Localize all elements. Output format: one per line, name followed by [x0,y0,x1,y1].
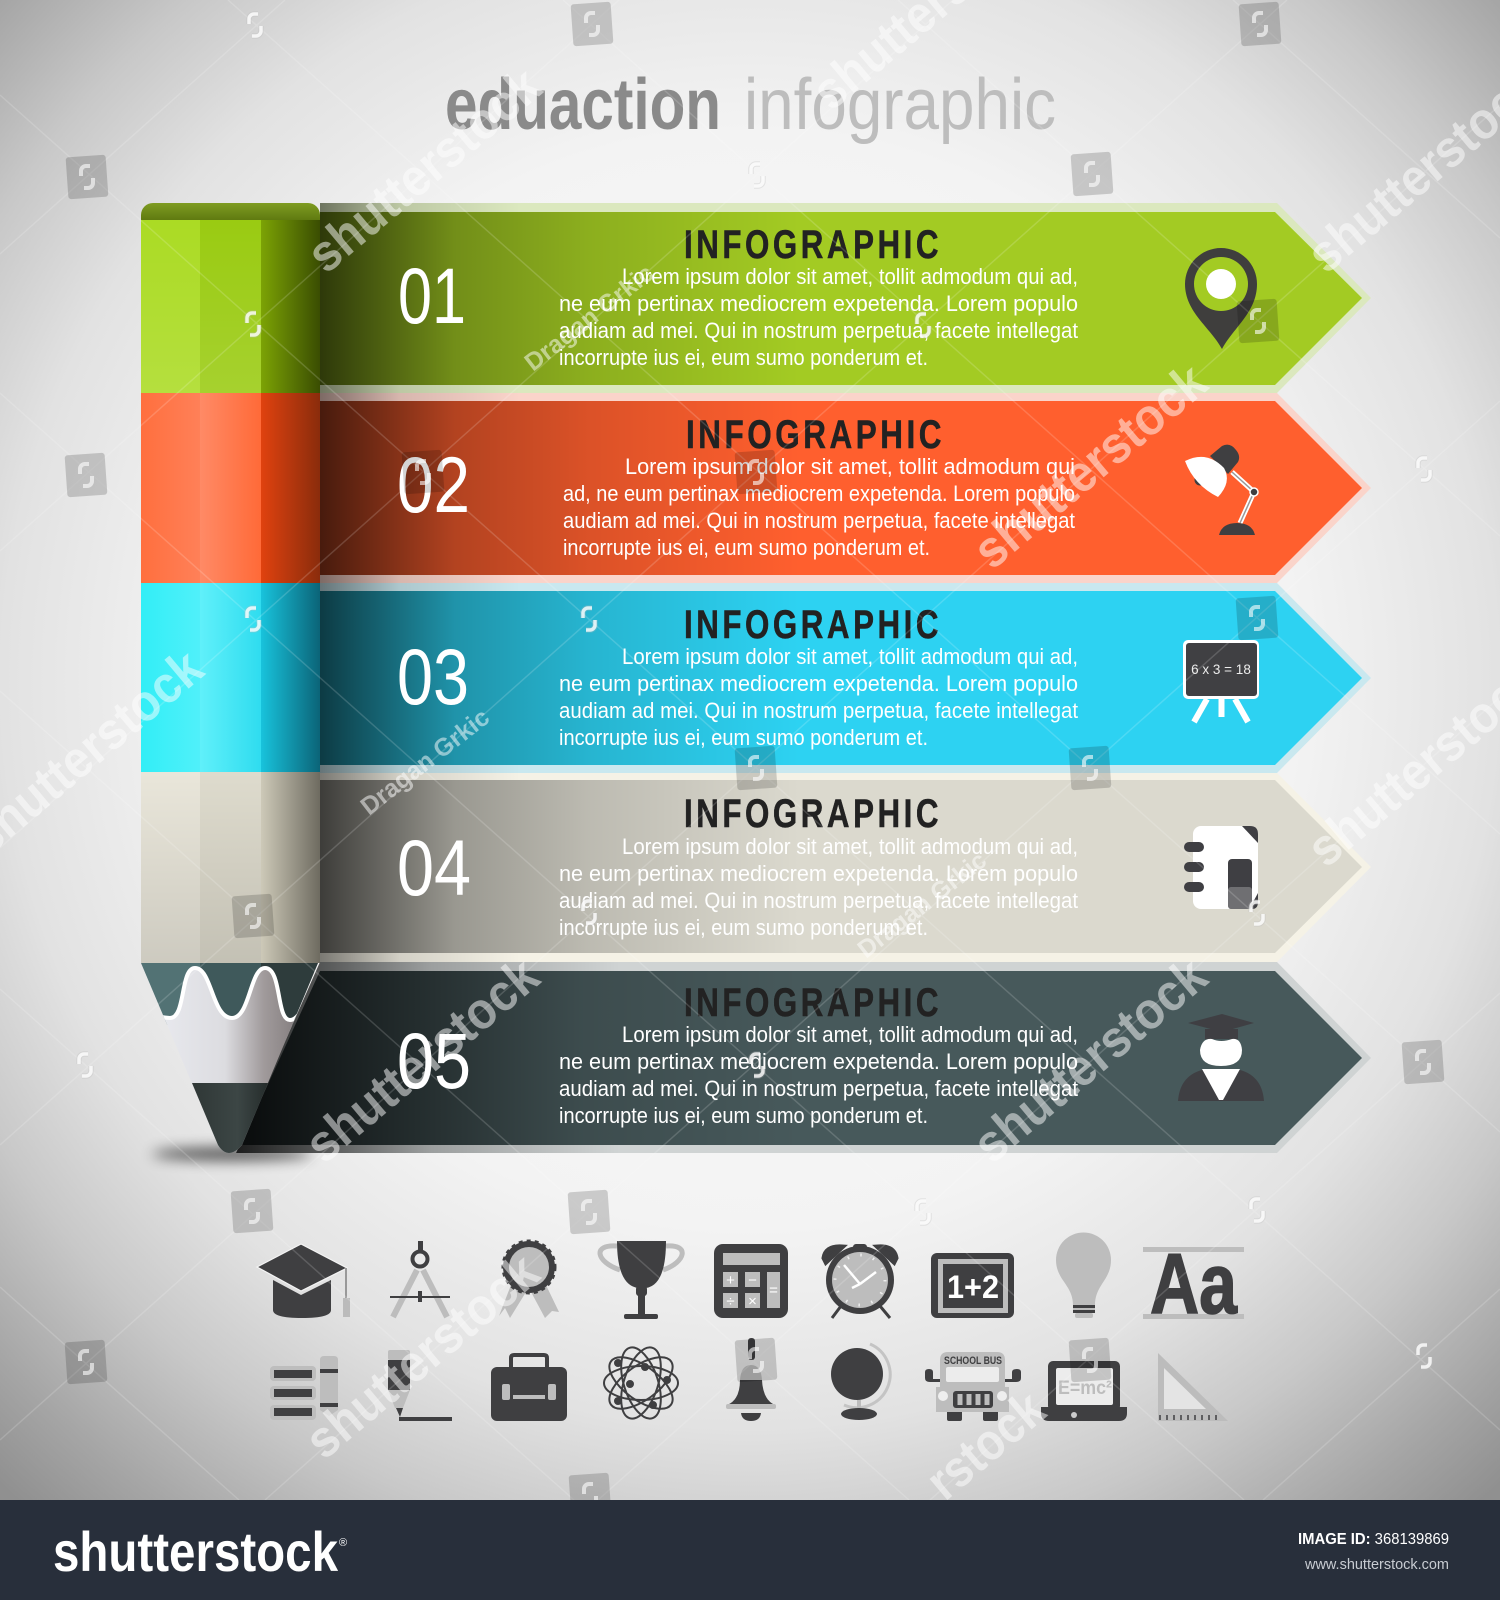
panel: banner 05: incorrupte ius ei, eum sumo ponderum et. [559,1103,928,1128]
panel: banner 01 [320,203,1371,393]
panel: banner 02: ad, ne eum pertinax mediocrem expetenda. Lorem populo [563,481,1075,506]
icon: school bus [925,1352,1021,1421]
ground shadow under pencil [152,1148,312,1160]
footer registered mark: ® [339,1537,347,1549]
panel: banner 02 [320,393,1371,583]
pencil lead tip [192,1083,268,1153]
icon: chalkboard [1183,640,1259,722]
panel: banner 02: Lorem ipsum dolor sit amet, tollit admodum qui [625,454,1075,479]
panel: banner 02: 02 [397,440,470,529]
icon: alarm clock [824,1244,896,1318]
icon: calculator: + [726,1272,735,1289]
footer image id: IMAGE ID: 368139869 [1298,1531,1449,1548]
icon: desk lamp [1185,445,1258,535]
watermark overlay: Dragan Grkic [519,259,659,377]
watermark overlay: shutterstock [294,1243,550,1470]
icon: marker pen [388,1350,452,1421]
panel: banner 04: audiam ad mei. Qui in nostrum perpetua, facete intellegat [559,888,1078,913]
footer website: www.shutterstock.com [1304,1556,1449,1573]
watermark overlay: shutterstock [294,947,550,1174]
icon: atom [601,1343,681,1423]
panel: banner 01: INFOGRAPHIC [684,223,942,267]
icon: set square [1158,1353,1228,1421]
panel: banner 05: ne eum pertinax mediocrem expetenda. Lorem populo [559,1049,1078,1074]
watermark overlay: Dragan Grkic [852,846,992,964]
panel: banner 01: 01 [398,251,466,340]
watermark overlay: shutterstock [962,353,1218,580]
icon: notebook [1184,826,1258,909]
panel: banner 01: Lorem ipsum dolor sit amet, tollit admodum qui ad, [622,264,1078,289]
panel: banner 04 [320,773,1371,962]
pencil wood cone [141,963,321,1153]
panel: banner 03: ne eum pertinax mediocrem expetenda. Lorem populo [559,671,1078,696]
icon: hand bell [726,1338,776,1421]
panel: banner 04: incorrupte ius ei, eum sumo ponderum et. [559,915,928,940]
icon: graduate [1178,1014,1264,1101]
icon: globe [831,1344,890,1420]
watermark overlay: rstock [915,1380,1056,1511]
panel: banner 04: INFOGRAPHIC [684,792,942,836]
icon: calculator: − [748,1272,757,1289]
title: eduaction [445,65,721,145]
icon: briefcase [491,1355,567,1421]
icon: laptop E=mc2: E=mc² [1058,1378,1112,1399]
panel: banner 04: Lorem ipsum dolor sit amet, tollit admodum qui ad, [622,834,1078,859]
icon: calculator: × [748,1293,757,1310]
pencil [141,203,321,1153]
icon row 1 [257,1232,1244,1332]
footer logo: shutterstock [53,1520,339,1583]
icon: location pin [1185,248,1257,349]
panel: banner 03: Lorem ipsum dolor sit amet, tollit admodum qui ad, [622,644,1078,669]
panel: banner 01: audiam ad mei. Qui in nostrum perpetua, facete intellegat [559,318,1078,343]
icon: graduation cap [257,1244,350,1318]
panel: banner 05: INFOGRAPHIC [684,981,942,1025]
icon: calculator [714,1244,788,1318]
panel: banner 02: incorrupte ius ei, eum sumo ponderum et. [563,535,930,560]
panel: banner 05: 05 [397,1016,471,1105]
icon: board 1+2: 1+2 [947,1269,999,1305]
panel: banner 03: incorrupte ius ei, eum sumo ponderum et. [559,725,928,750]
panel: banner 02: audiam ad mei. Qui in nostrum perpetua, facete intellegat [563,508,1075,533]
icon: calculator: ÷ [726,1293,735,1310]
icon: board 1+2 [931,1253,1014,1318]
panel: banner 02: INFOGRAPHIC [686,413,945,457]
panel: banner 05 [236,962,1371,1153]
panel: banner 01: incorrupte ius ei, eum sumo ponderum et. [559,345,928,370]
panel: banner 04: ne eum pertinax mediocrem expetenda. Lorem populo [559,861,1078,886]
icon row 2 [270,1338,1228,1423]
icon: trophy [600,1241,682,1319]
panel: banner 03: 03 [397,632,469,721]
icon: laptop E=mc2 [1041,1361,1127,1421]
panel: banner 01: ne eum pertinax mediocrem expetenda. Lorem populo [559,291,1078,316]
icon: chalkboard: 6 x 3 = 18 [1191,662,1251,677]
icon: calculator: = [769,1282,778,1299]
panel: banner 05: Lorem ipsum dolor sit amet, tollit admodum qui ad, [622,1022,1078,1047]
icon: books [270,1356,338,1420]
panel: banner 05: audiam ad mei. Qui in nostrum perpetua, facete intellegat [559,1076,1078,1101]
icon: compass [390,1241,450,1317]
title [445,65,1056,145]
panel: banner 04: 04 [397,823,471,912]
icon: light bulb [1056,1232,1111,1318]
footer bar [0,1500,1500,1600]
watermark overlay: Dragan Grkic [355,703,495,821]
panel: banner 03: INFOGRAPHIC [684,603,942,647]
title: infographic [744,65,1056,145]
panel: banner 03: audiam ad mei. Qui in nostrum perpetua, facete intellegat [559,698,1078,723]
icon: typography Aa: Aa [1150,1237,1238,1332]
watermark overlay: shutterstock [296,57,552,284]
icon: award rosette [499,1241,559,1318]
watermark overlay: shutterstock [962,947,1218,1174]
panel: banner 03 [320,583,1371,773]
icon: school bus: SCHOOL BUS [944,1355,1002,1367]
